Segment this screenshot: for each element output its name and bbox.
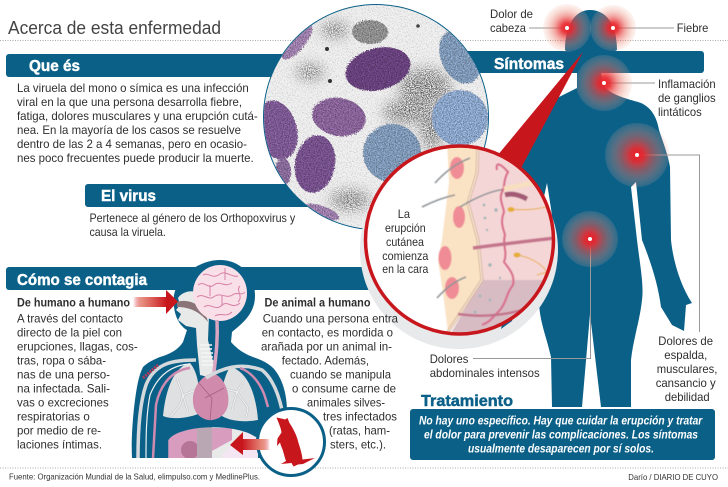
text block: de animal a humano: Cuando una persona entra xyxy=(263,312,398,326)
label: dolores de espalda: Dolores de xyxy=(658,334,713,348)
panel: tratamiento: usualmente desaparecen por sí solos. xyxy=(468,442,654,456)
deep layer xyxy=(451,280,542,332)
text block: de animal a humano: animales silves- xyxy=(307,396,385,410)
arm vessels xyxy=(138,360,282,458)
text block: de humano a humano: tras, ropa o sába- xyxy=(17,354,106,368)
circle shadow xyxy=(360,151,558,349)
arrow: animal to human xyxy=(230,432,270,455)
body hand over shadow xyxy=(501,300,517,329)
skin caption: erupción xyxy=(385,221,426,235)
label: dolores abdominales: abdominales intensos xyxy=(430,366,540,380)
symptom leader lines xyxy=(473,28,700,358)
label: dolores de espalda: espalda, xyxy=(664,348,707,362)
papillae xyxy=(482,164,513,325)
symptom: abdomen xyxy=(562,211,618,267)
epidermis edge xyxy=(448,140,482,332)
text block: Que és: viral en la que una persona desarrolla fiebre, xyxy=(17,95,242,109)
text block: El virus xyxy=(90,211,295,239)
text block: de animal a humano: arañada por un animal in- xyxy=(261,340,392,354)
heading: Síntomas xyxy=(450,51,704,73)
text block: Que és: dentro de las 2 a 4 semanas, pero en ocasio- xyxy=(17,137,247,151)
text block: de animal a humano: fectado. Además, xyxy=(282,354,369,368)
text block: de animal a humano xyxy=(261,296,398,452)
micrograph of virus particles xyxy=(250,4,489,230)
label: inflamación: de ganglios xyxy=(658,91,716,105)
heading: El virus: El virus xyxy=(101,188,156,205)
purple particles xyxy=(264,26,412,221)
heading: Síntomas: Síntomas xyxy=(494,56,564,73)
text block: de animal a humano: De animal a humano xyxy=(264,296,370,310)
abdomen organs xyxy=(212,427,256,458)
label: dolores de espalda: debilidad xyxy=(665,390,710,404)
dermis xyxy=(469,150,552,280)
skin caption xyxy=(382,207,429,276)
text block: de humano a humano: laciones íntimas. xyxy=(17,438,102,452)
icon: rat xyxy=(276,418,315,466)
nasal cavity xyxy=(177,301,208,322)
lungs xyxy=(163,363,258,421)
symptom: ganglios xyxy=(576,55,632,111)
nerves xyxy=(514,206,547,276)
text block: de humano a humano: erupciones, llagas, cos- xyxy=(17,340,138,354)
text block: de humano a humano: directo de la piel con xyxy=(17,326,122,340)
arrow: human to human xyxy=(133,290,178,314)
label: dolores de espalda: cansancio y xyxy=(656,376,716,390)
text block: Que és xyxy=(17,81,258,165)
heading: Cómo se contagia xyxy=(6,267,378,290)
skin cross-section circle xyxy=(366,140,565,345)
hairs xyxy=(422,158,507,298)
title: Acerca de esta enfermedad xyxy=(8,18,221,38)
text block: de animal a humano: o consume carne de xyxy=(292,382,396,396)
text block: de humano a humano: por medio de re- xyxy=(17,424,101,438)
text block: de humano a humano: nas de una perso- xyxy=(17,368,110,382)
source footer: Fuente: Organización Mundial de la Salud, elimpulso.com y MedlinePlus. xyxy=(9,472,260,482)
text block: de animal a humano: en contacto, es mordida o xyxy=(262,326,393,340)
text block: de humano a humano: respiratorias o xyxy=(17,410,90,424)
heading: Cómo se contagia: Cómo se contagia xyxy=(17,272,147,289)
dark fuzzy particle xyxy=(352,20,388,44)
rash spots xyxy=(438,157,465,299)
face and airway xyxy=(176,291,215,378)
label: dolores de espalda: musculares, xyxy=(657,362,717,376)
follicle xyxy=(503,180,534,192)
text block: Que és: nes poco frecuentes puede producir la muerte. xyxy=(17,151,254,165)
skin caption: La xyxy=(398,207,410,221)
callout wedge xyxy=(497,52,583,170)
text block: Que és: La viruela del mono o símica es una infección xyxy=(17,81,249,95)
text block: de animal a humano: cuando se manipula xyxy=(290,368,391,382)
heading: El virus xyxy=(85,184,310,207)
label: fiebre: Fiebre xyxy=(677,21,709,35)
label: inflamación xyxy=(658,77,716,119)
text block: de humano a humano: na infectada. Sali- xyxy=(17,382,110,396)
diaphragm xyxy=(167,426,258,458)
text block: de animal a humano: (ratas, ham- xyxy=(329,424,390,438)
text block: de humano a humano: vas o excreciones xyxy=(17,396,109,410)
label: inflamación: Inflamación xyxy=(658,77,716,91)
symptom: fiebre xyxy=(590,5,636,51)
rat circle xyxy=(258,408,324,476)
skin caption: cutánea xyxy=(386,235,424,249)
text block: El virus: causa la viruela. xyxy=(90,225,166,239)
text block: de animal a humano: sters, etc.). xyxy=(330,438,386,452)
skin caption: comienza xyxy=(382,249,429,263)
heart xyxy=(193,373,228,420)
trachea xyxy=(200,345,214,365)
symptom: dolor de cabeza xyxy=(543,4,591,52)
text block: El virus: Pertenece al género de los Orthopoxvirus y xyxy=(90,211,295,225)
label: dolor de cabeza: Dolor de xyxy=(490,7,533,21)
teal silhouette xyxy=(132,260,287,458)
text block: de humano a humano: A través del contacto xyxy=(17,312,123,326)
epidermis xyxy=(438,140,482,332)
vessels xyxy=(458,238,555,316)
text block: Que és: fatiga, dolores musculares y una erupción cutá- xyxy=(17,109,258,123)
text block: de humano a humano: De humano a humano xyxy=(17,296,130,310)
gray debris clusters xyxy=(296,22,451,210)
text block: Que és: nea. En la mayoría de los casos se resuelve xyxy=(17,123,241,137)
skin caption: en la cara xyxy=(382,262,429,276)
heading: Que és xyxy=(6,54,306,77)
cells xyxy=(474,204,501,313)
label: dolores de espalda xyxy=(656,334,717,404)
shoulder muscle xyxy=(143,365,158,378)
anatomy figure xyxy=(132,260,287,462)
text block: de humano a humano xyxy=(17,296,138,452)
bronchi xyxy=(170,378,248,418)
body silhouette xyxy=(499,10,692,407)
heading: Que és: Que és xyxy=(29,58,80,75)
text block: de animal a humano: tres infectados xyxy=(323,410,397,424)
label: dolores abdominales: Dolores xyxy=(430,352,468,366)
dark specks xyxy=(325,47,329,51)
brain xyxy=(193,265,247,321)
panel: tratamiento xyxy=(410,409,715,460)
label: dolor de cabeza xyxy=(490,7,533,35)
heading: Tratamiento: Tratamiento xyxy=(421,393,513,410)
blue particles xyxy=(363,24,489,182)
label: dolor de cabeza: cabeza xyxy=(490,21,526,35)
label: dolores abdominales xyxy=(430,352,540,380)
credit footer: Darío / DIARIO DE CUYO xyxy=(628,472,718,482)
symptom: espalda xyxy=(605,123,669,187)
brain stem xyxy=(214,320,217,372)
label: inflamación: lintáticos xyxy=(658,105,702,119)
